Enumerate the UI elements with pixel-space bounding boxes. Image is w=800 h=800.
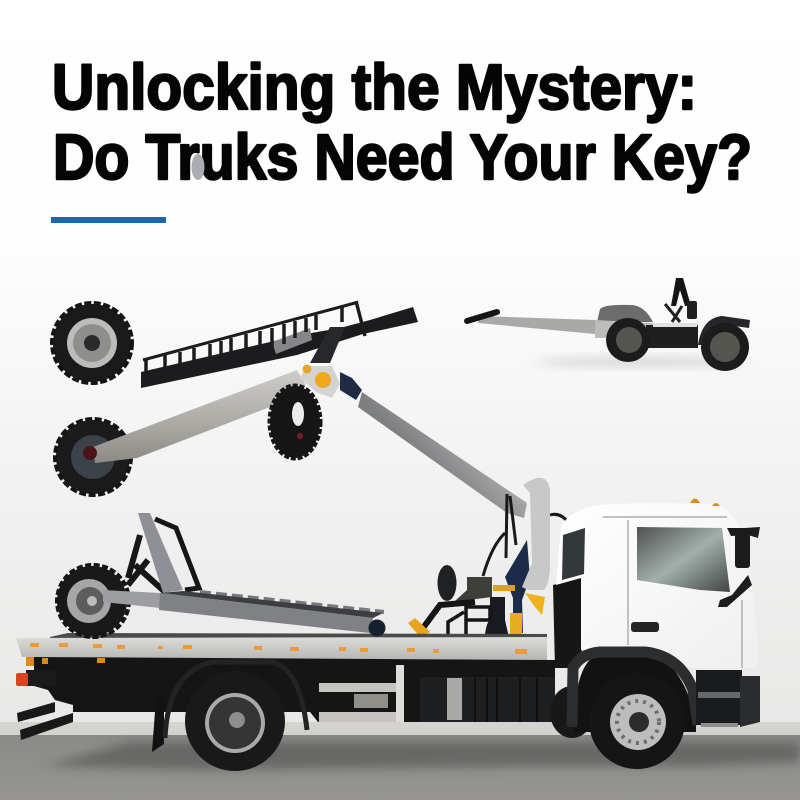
ramp wheel xyxy=(57,565,129,637)
blue accent rule xyxy=(51,217,166,223)
rear mudflap xyxy=(152,698,164,752)
seat frame xyxy=(448,607,490,640)
door handle xyxy=(631,622,659,632)
column blue panel xyxy=(505,540,530,633)
column yellow strip xyxy=(493,585,515,591)
wheel well xyxy=(574,654,696,732)
mirror arm xyxy=(718,575,752,607)
dolly front hub xyxy=(616,327,642,353)
dolly silver bar xyxy=(478,316,595,334)
ladder pivot bracket xyxy=(310,327,345,363)
ladder top rail xyxy=(143,303,355,360)
crane column xyxy=(483,478,568,643)
joint yellow cap large xyxy=(315,372,331,388)
ramp main beam xyxy=(159,593,373,633)
small tow dolly xyxy=(467,278,750,371)
rear fender xyxy=(165,662,307,738)
column yellow base xyxy=(510,613,522,643)
ladder rungs xyxy=(146,307,342,376)
side fuel tanks xyxy=(420,677,555,722)
tank silver cylinder xyxy=(447,678,462,720)
dolly mast xyxy=(671,278,691,306)
dolly front wheel xyxy=(606,318,650,362)
mirror top xyxy=(727,527,760,538)
column dark motor xyxy=(484,597,510,642)
ladder lower beam xyxy=(141,307,418,388)
front wheel xyxy=(589,673,685,769)
rear light housing xyxy=(26,670,56,686)
front hub xyxy=(629,712,649,732)
icon: grey drop in title xyxy=(192,154,204,180)
cab door window xyxy=(637,527,730,592)
ramp extension xyxy=(103,590,160,608)
seat back xyxy=(438,565,456,601)
ramp black back brace xyxy=(155,519,199,590)
cab body xyxy=(556,503,758,668)
rear tyre xyxy=(185,671,285,771)
dolly silver strip xyxy=(653,323,697,327)
dolly silver skirt xyxy=(595,320,654,338)
rear hub xyxy=(229,712,245,728)
road surface xyxy=(0,735,800,800)
tank panel lines xyxy=(475,678,537,722)
flatbed silver rail xyxy=(16,637,547,660)
step area xyxy=(696,670,742,725)
rear light red xyxy=(16,673,28,686)
lower left wheel of upper arm xyxy=(55,419,131,495)
rear rim ring xyxy=(205,693,265,753)
joint yellow cap small xyxy=(302,364,312,374)
seat yellow foot xyxy=(408,618,430,637)
column yellow plate xyxy=(525,593,545,615)
rear amber lights xyxy=(26,657,105,666)
front wheel arch xyxy=(572,652,698,727)
ramp upright plate xyxy=(138,513,183,593)
front rim holes xyxy=(617,701,659,743)
chassis xyxy=(34,657,555,722)
dolly rear hub xyxy=(710,332,740,362)
floating wheel top left xyxy=(52,303,132,383)
long diagonal arm xyxy=(358,392,527,518)
dolly box xyxy=(687,301,697,319)
joint silver plate xyxy=(300,366,340,398)
joint blue bracket xyxy=(340,372,362,400)
seat cushion xyxy=(455,577,492,601)
dolly rear fender xyxy=(698,316,750,345)
title xyxy=(52,51,752,193)
front rim xyxy=(610,694,666,750)
ladder grey plate xyxy=(272,328,312,354)
column hoses xyxy=(483,494,568,576)
ladder boom xyxy=(141,301,418,388)
boom joint xyxy=(300,364,362,400)
ramp top plate xyxy=(160,591,383,618)
silver side frame xyxy=(319,665,404,722)
cab rear shell xyxy=(553,577,582,668)
lower step plate xyxy=(701,723,738,727)
dolly grey body xyxy=(597,305,653,322)
flatbed deck xyxy=(50,633,547,640)
front tyre xyxy=(589,673,685,769)
behind-arch inner tyre xyxy=(550,686,594,738)
dolly chassis xyxy=(646,325,698,348)
lower ramp arm assembly xyxy=(57,513,386,637)
rear wheel xyxy=(185,671,285,771)
rear rim centre xyxy=(209,697,261,749)
upper arm hub xyxy=(83,446,97,460)
ladder end post xyxy=(356,301,365,336)
step plate xyxy=(698,692,740,698)
flatbed amber reflectors xyxy=(30,643,527,654)
ramp suspension xyxy=(128,535,165,592)
cab rear window xyxy=(562,528,585,580)
dolly linkage xyxy=(665,304,682,322)
dolly black handle xyxy=(467,312,497,321)
roof amber markers xyxy=(690,498,720,506)
main mirror xyxy=(735,531,750,568)
middle hanging wheel xyxy=(269,385,321,459)
ramp end roller xyxy=(368,620,386,636)
upper silver arm xyxy=(93,370,306,463)
dolly shadow xyxy=(535,357,745,367)
cab door line xyxy=(603,517,742,668)
road shadow under truck xyxy=(45,742,800,770)
title line 1: Unlocking the Mystery: xyxy=(52,51,697,123)
ramp teeth xyxy=(200,592,384,612)
seat leg xyxy=(423,602,475,628)
kerb band xyxy=(0,722,800,736)
front bumper xyxy=(740,676,760,727)
dolly rear wheel xyxy=(701,323,749,371)
operator seat xyxy=(408,565,492,640)
rear under-run bars xyxy=(17,702,73,740)
column silver body xyxy=(522,478,550,590)
cab mirror assembly xyxy=(718,527,760,607)
